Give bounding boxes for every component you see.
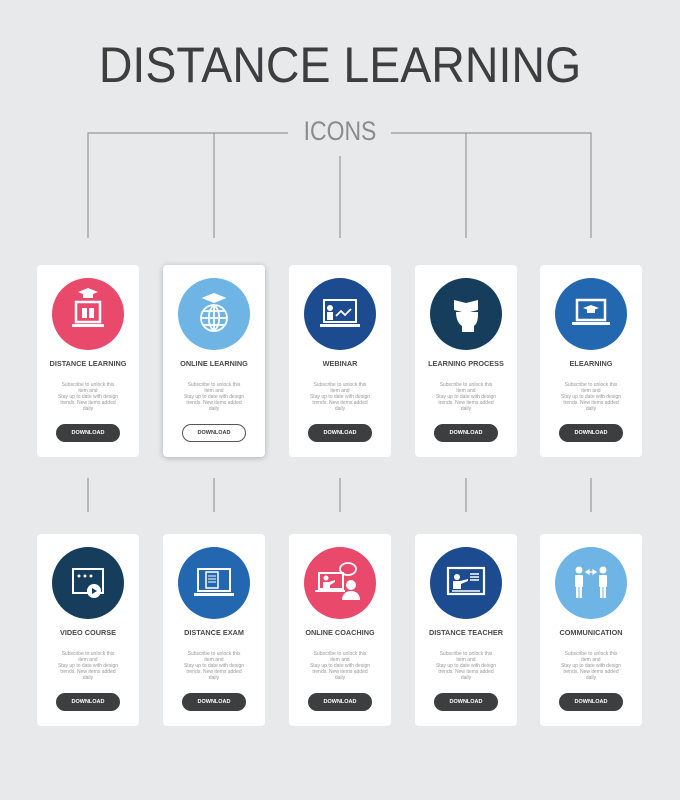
- icon: video screen: [52, 547, 124, 619]
- card: learning process: DOWNLOAD: [450, 430, 482, 436]
- card: distance learning: DOWNLOAD: [72, 430, 104, 436]
- card: distance teacher: Subscribe to unlock this item and: [440, 651, 492, 663]
- card: distance teacher: Stay up to date with design trends. New items added daily: [436, 663, 496, 681]
- card: elearning: Subscribe to unlock this item and: [565, 382, 617, 394]
- card: communication: Subscribe to unlock this item and: [565, 651, 617, 663]
- card: elearning: Stay up to date with design trends. New items added daily: [561, 394, 621, 412]
- card: distance learning: Stay up to date with design trends. New items added daily: [58, 394, 118, 412]
- card: online learning: ONLINE LEARNING: [180, 359, 248, 368]
- card: online coaching: Stay up to date with design trends. New items added daily: [310, 663, 370, 681]
- card: webinar: DOWNLOAD: [324, 430, 356, 436]
- subtitle: icons: ICONS: [304, 116, 376, 146]
- icon: webinar board: [304, 278, 376, 350]
- title: DISTANCE LEARNING: [99, 37, 581, 93]
- card: distance exam: DOWNLOAD: [198, 699, 230, 705]
- card: distance exam: Subscribe to unlock this item and: [188, 651, 240, 663]
- card: video course: [37, 534, 139, 726]
- card: elearning: [540, 265, 642, 457]
- card: communication: Stay up to date with design trends. New items added daily: [561, 663, 621, 681]
- icon: two people with arrow: [555, 547, 627, 619]
- card: webinar: Stay up to date with design trends. New items added daily: [310, 394, 370, 412]
- card: distance teacher: [415, 534, 517, 726]
- card: distance learning: Subscribe to unlock this item and: [62, 382, 114, 394]
- card: distance exam: [163, 534, 265, 726]
- icon: laptop with document: [178, 547, 250, 619]
- icon: coach and student: [304, 547, 376, 619]
- card: video course: Subscribe to unlock this item and: [62, 651, 114, 663]
- icon: head with book: [430, 278, 502, 350]
- card: distance learning: [37, 265, 139, 457]
- icon: globe with cap: [178, 278, 250, 350]
- card: learning process: Subscribe to unlock this item and: [440, 382, 492, 394]
- card: online coaching: [289, 534, 391, 726]
- card: distance learning: DISTANCE LEARNING: [50, 359, 126, 368]
- card: online learning: Stay up to date with design trends. New items added daily: [184, 394, 244, 412]
- card: online learning: [163, 265, 265, 457]
- icon: laptop with cap: [555, 278, 627, 350]
- card: video course: VIDEO COURSE: [60, 628, 116, 637]
- card: learning process: [415, 265, 517, 457]
- card: online coaching: ONLINE COACHING: [305, 628, 375, 637]
- icon: teacher at board: [430, 547, 502, 619]
- card: communication: [540, 534, 642, 726]
- card: webinar: WEBINAR: [323, 359, 357, 368]
- card: communication: COMMUNICATION: [559, 628, 623, 637]
- card: communication: DOWNLOAD: [574, 699, 608, 705]
- card: distance teacher: DOWNLOAD: [450, 699, 482, 705]
- card: video course: DOWNLOAD: [72, 699, 104, 705]
- card: learning process: LEARNING PROCESS: [428, 359, 504, 368]
- card: distance teacher: DISTANCE TEACHER: [429, 628, 503, 637]
- card: elearning: DOWNLOAD: [574, 430, 608, 436]
- card: online coaching: Subscribe to unlock this item and: [314, 651, 366, 663]
- card: webinar: Subscribe to unlock this item and: [314, 382, 366, 394]
- card: online learning: Subscribe to unlock this item and: [188, 382, 240, 394]
- card: learning process: Stay up to date with design trends. New items added daily: [436, 394, 496, 412]
- card: webinar: [289, 265, 391, 457]
- card: online coaching: DOWNLOAD: [324, 699, 356, 705]
- icon: laptop with book: [52, 278, 124, 350]
- card: video course: Stay up to date with design trends. New items added daily: [58, 663, 118, 681]
- card: online learning: DOWNLOAD: [198, 430, 230, 436]
- card: distance exam: DISTANCE EXAM: [184, 628, 244, 637]
- card: distance exam: Stay up to date with design trends. New items added daily: [184, 663, 244, 681]
- card: elearning: ELEARNING: [570, 359, 612, 368]
